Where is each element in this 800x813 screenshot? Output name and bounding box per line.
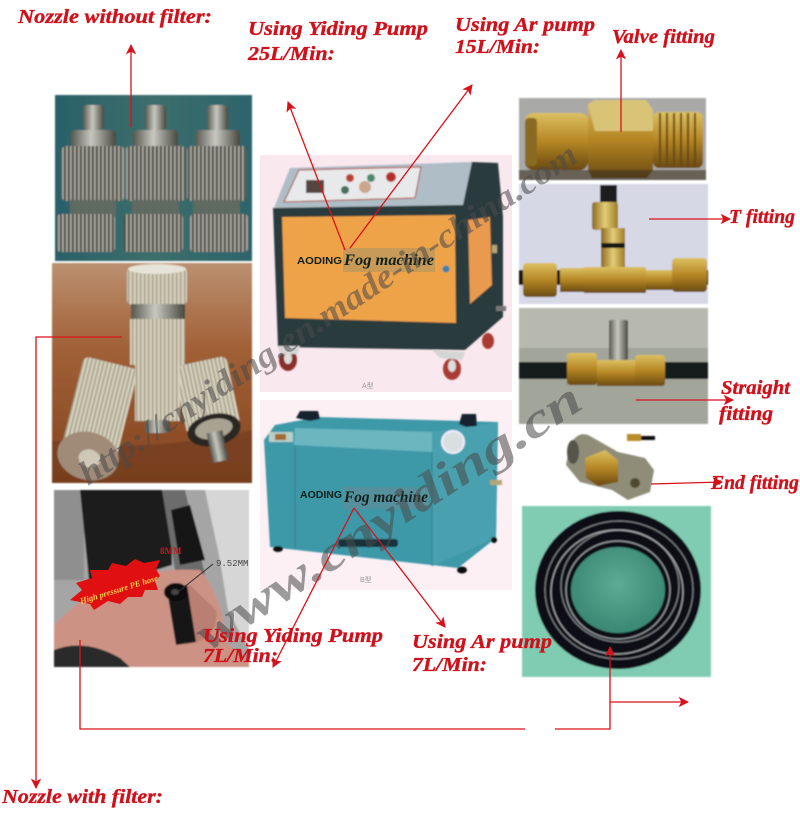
dimension labels: 9.52MM [216, 559, 248, 569]
panel: machine A: A型 [362, 381, 374, 390]
watermark: made-in-china url: http://cnyiding.en.made-in-china.com [72, 136, 584, 493]
photo: PE hose coil [522, 506, 711, 677]
label: nozzle without filter: Nozzle without filter: [17, 6, 212, 28]
panel: machine B: B型 [360, 575, 372, 584]
machine B name plate: Fog machine [343, 489, 428, 506]
photo: high pressure PE hose in hand [54, 490, 249, 667]
machine B name plate: AODING [300, 490, 342, 501]
machine A name plate: Fog machine [343, 252, 434, 269]
photo: straight fitting [519, 308, 708, 424]
label: end fitting: End fitting [710, 472, 799, 494]
label: machine B Yiding flow: 7L/Min: [203, 645, 278, 667]
label: straight fitting: fitting [719, 403, 773, 425]
machine A name plate: AODING [297, 256, 342, 267]
label: T fitting: T fitting [729, 206, 795, 228]
label: machine A Ar flow: 15L/Min: [455, 36, 540, 58]
label: straight fitting: Straight [721, 377, 791, 399]
panel: machine A [260, 155, 512, 392]
label: machine B Yiding pump: Using Yiding Pump [203, 625, 383, 647]
label: nozzle with filter: Nozzle with filter: [1, 786, 163, 808]
machine B name plate [300, 487, 429, 509]
label: machine B Ar pump: Using Ar pump [412, 631, 552, 653]
dimension labels [160, 546, 248, 592]
photo: nozzles without filter [55, 95, 252, 261]
watermark: cnyiding url: www.cnyiding.cn [185, 372, 591, 661]
label: machine A Yiding flow: 25L/Min: [247, 43, 335, 65]
photo: valve fitting [519, 98, 706, 180]
dimension labels: 8MM [160, 546, 182, 556]
photo: T fitting [519, 184, 708, 304]
label: valve fitting: Valve fitting [612, 26, 715, 48]
machine A name plate [297, 248, 435, 272]
photo: nozzles with filter [52, 263, 252, 487]
callout: high pressure PE hose starburst [70, 559, 160, 610]
photo: end fitting [566, 434, 655, 500]
panel: machine B [260, 400, 512, 590]
label: machine B Ar flow: 7L/Min: [412, 654, 487, 676]
label: straight fitting [719, 377, 791, 425]
label: machine A Ar pump: Using Ar pump [455, 14, 595, 36]
arrows: callout lines [36, 45, 733, 788]
label: machine A Yiding pump: Using Yiding Pump [248, 18, 428, 40]
callout: high pressure PE hose starburst: High pressure PE hose [78, 573, 159, 606]
